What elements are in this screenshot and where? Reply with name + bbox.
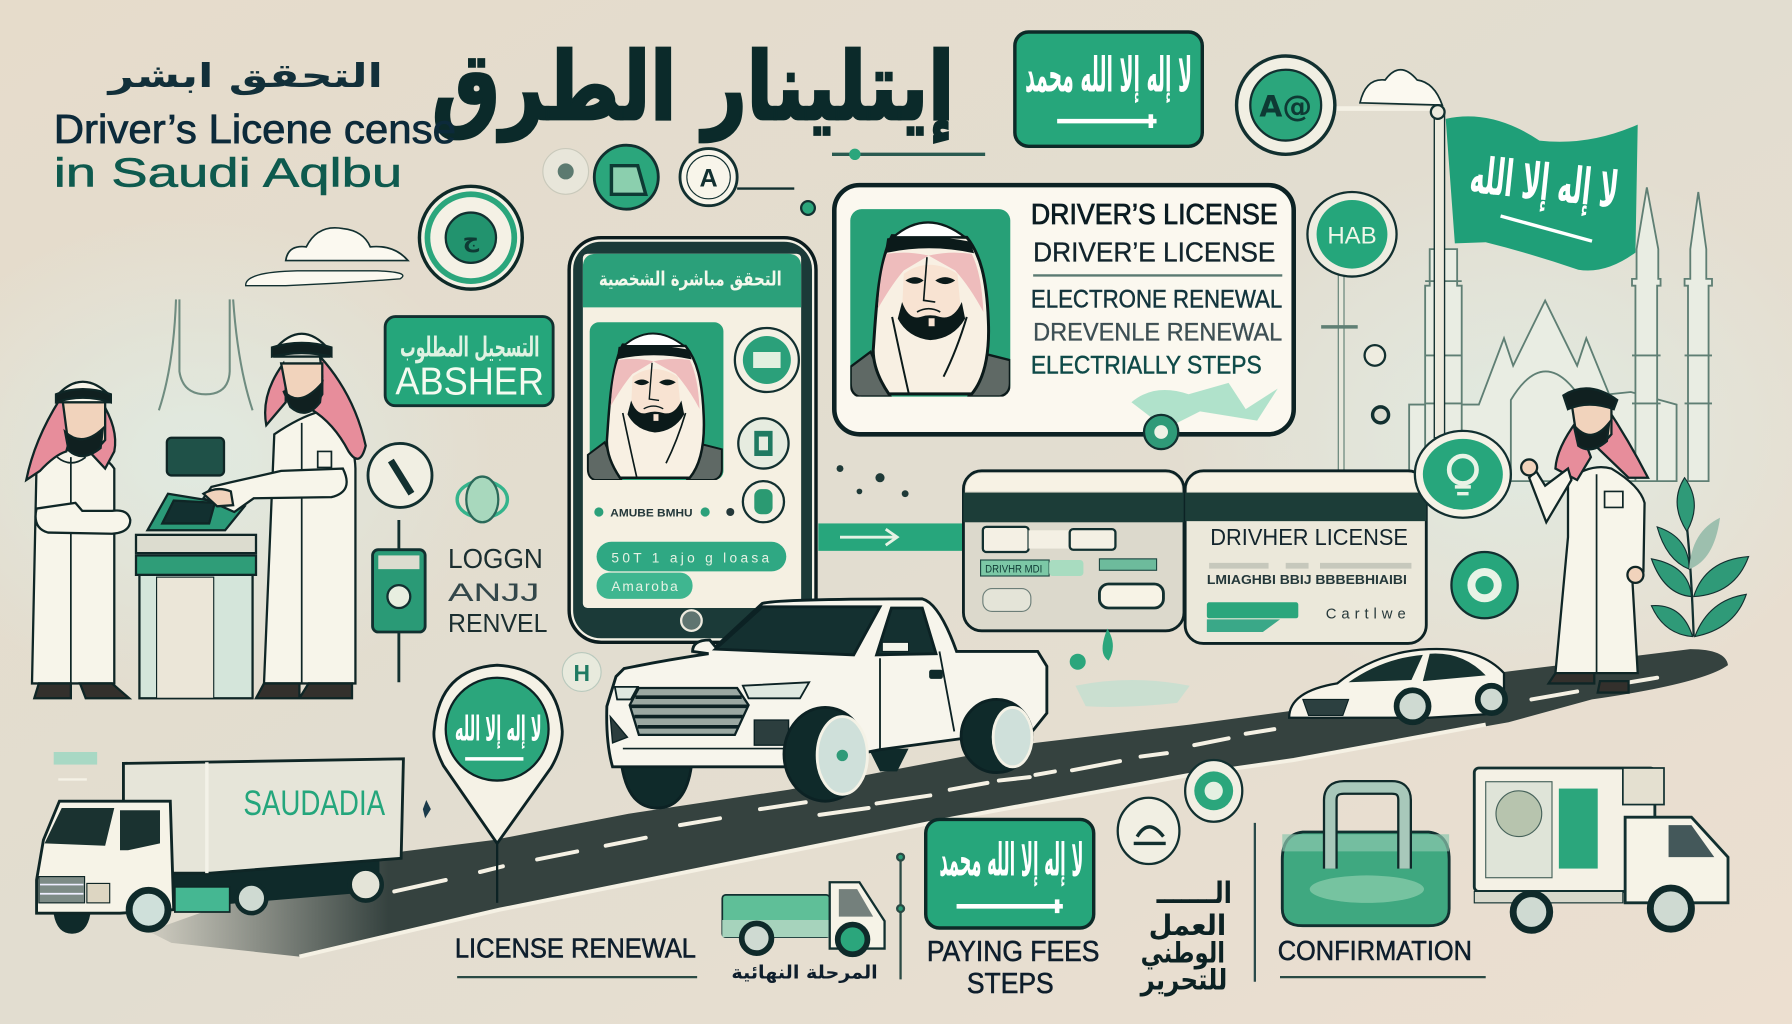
- badge: ABSHER: التسجيل المطلوب: [400, 333, 539, 364]
- labels: step captions: LICENSE RENEWAL: [455, 933, 696, 964]
- scatter marks: [837, 465, 909, 497]
- login icons and label: ANJJ: [448, 579, 539, 607]
- badge: ABSHER: [385, 317, 553, 406]
- infographic canvas: لا إله إلا الله محمد: [1025, 47, 1192, 103]
- icon: top round badge and cloud: A@: [1259, 90, 1312, 125]
- phone buttons: Amaroba: [611, 579, 678, 594]
- large flag on pole: لا إله إلا الله: [1467, 145, 1621, 220]
- panel: driver's license card: DRIVER’E LICENSE: [1033, 237, 1275, 268]
- location pin: [434, 665, 562, 903]
- road: [149, 649, 1728, 957]
- Arabic vertical text: [1139, 823, 1255, 997]
- title: Arabic headline: إيتلينار الطرق: [432, 33, 954, 142]
- small badges row: [543, 145, 985, 215]
- Arabic vertical text: للتحرير: [1139, 963, 1227, 997]
- labels: step captions: [455, 933, 1472, 1000]
- subtitle block: التحقق ابشر: [106, 56, 383, 96]
- person: right man: [1521, 388, 1648, 693]
- icons: small step circles: [1118, 760, 1242, 864]
- icon: H badge: [562, 653, 601, 691]
- badge: ABSHER: ABSHER: [395, 360, 544, 403]
- small badges row: A: [699, 164, 718, 192]
- labels: step captions: PAYING FEES: [927, 936, 1099, 968]
- subtitle block: in Saudi Aqlbu: [54, 149, 402, 195]
- kiosk: [136, 438, 256, 698]
- icon: plant: [1651, 478, 1749, 637]
- panel: right license card: [1185, 471, 1426, 643]
- infographic canvas: لا إله إلا الله محمد: [939, 833, 1083, 887]
- panel: smartphone: AMUBE BMHU: [610, 508, 693, 520]
- people at kiosk: [26, 334, 366, 698]
- panel: smartphone: التحقق مباشرة الشخصية: [599, 268, 782, 291]
- panel: left payment card: [963, 471, 1184, 631]
- icon: HAB badge: HAB: [1327, 222, 1377, 249]
- labels: step captions: المرحلة النهائية: [731, 962, 878, 983]
- icon: round seal and cloud: [246, 186, 522, 289]
- panel: driver's license card: [834, 185, 1294, 449]
- large flag on pole: [1431, 105, 1638, 438]
- vehicle: delivery truck left: SAUDADIA: [243, 783, 385, 823]
- location pin: لا إله إلا الله: [455, 710, 542, 750]
- vehicle: sedan: [1289, 649, 1505, 722]
- person: left man: [26, 382, 130, 698]
- login icons and label: RENVEL: [448, 608, 547, 638]
- icon: small round badge: [1451, 552, 1518, 618]
- flag card bottom: [926, 819, 1094, 928]
- panel: right license card: LMIAGHBI BBIJ BBBEBHIAIBI: [1207, 573, 1407, 587]
- panel: smartphone: [569, 238, 816, 642]
- login icons and label: LOGGN: [448, 543, 543, 574]
- phone buttons: 50T 1 ajo g loasa: [611, 550, 770, 565]
- icon: green bag: [1282, 787, 1449, 926]
- Arabic vertical text: الوطني: [1141, 935, 1225, 969]
- decorative smudges by pickup: [1070, 629, 1190, 707]
- marks above left truck: [54, 752, 431, 818]
- panel: right license card: Cartlwe: [1326, 606, 1406, 622]
- phone status icons: [735, 328, 799, 522]
- panel: right license card: DRIVHER LICENSE: [1210, 524, 1408, 550]
- mosque silhouette: [1409, 187, 1712, 481]
- icon: top round badge and cloud: [1237, 56, 1442, 154]
- login icons and label: [368, 443, 547, 682]
- subtitle block: [54, 56, 456, 195]
- panel: left payment card: DRIVHR MDI: [985, 564, 1042, 576]
- vehicle: delivery truck right: [1474, 768, 1728, 930]
- panel: driver's license card: ELECTRONE RENEWAL: [1031, 285, 1282, 313]
- icon: light bulb badge: [1415, 431, 1511, 518]
- labels: step captions: CONFIRMATION: [1278, 935, 1472, 966]
- vehicle: pickup truck: [607, 599, 1047, 808]
- phone buttons: [597, 542, 786, 599]
- vehicle: delivery truck left: [37, 759, 403, 934]
- vehicle: small green truck: [722, 882, 885, 954]
- Arabic vertical text: العمل: [1149, 908, 1226, 942]
- panel: driver's license card: ELECTRIALLY STEPS: [1031, 352, 1262, 380]
- icon: round seal and cloud: ج: [463, 227, 480, 253]
- faint towers behind people: [159, 299, 253, 410]
- arrow between phone and cards: [818, 523, 962, 551]
- icon: HAB badge: [1307, 192, 1397, 471]
- Arabic vertical text: الـــــــ: [1156, 876, 1232, 911]
- icon: H badge: H: [573, 660, 590, 686]
- subtitle block: Driver’s Licene cense: [54, 106, 456, 152]
- flag card top: [1015, 32, 1202, 146]
- panel: driver's license card: DREVENLE RENEWAL: [1033, 319, 1282, 347]
- labels: step captions: STEPS: [967, 968, 1054, 1000]
- dividers under captions: [457, 854, 1486, 979]
- panel: driver's license card: DRIVER’S LICENSE: [1031, 199, 1278, 231]
- person: right man: [203, 334, 366, 698]
